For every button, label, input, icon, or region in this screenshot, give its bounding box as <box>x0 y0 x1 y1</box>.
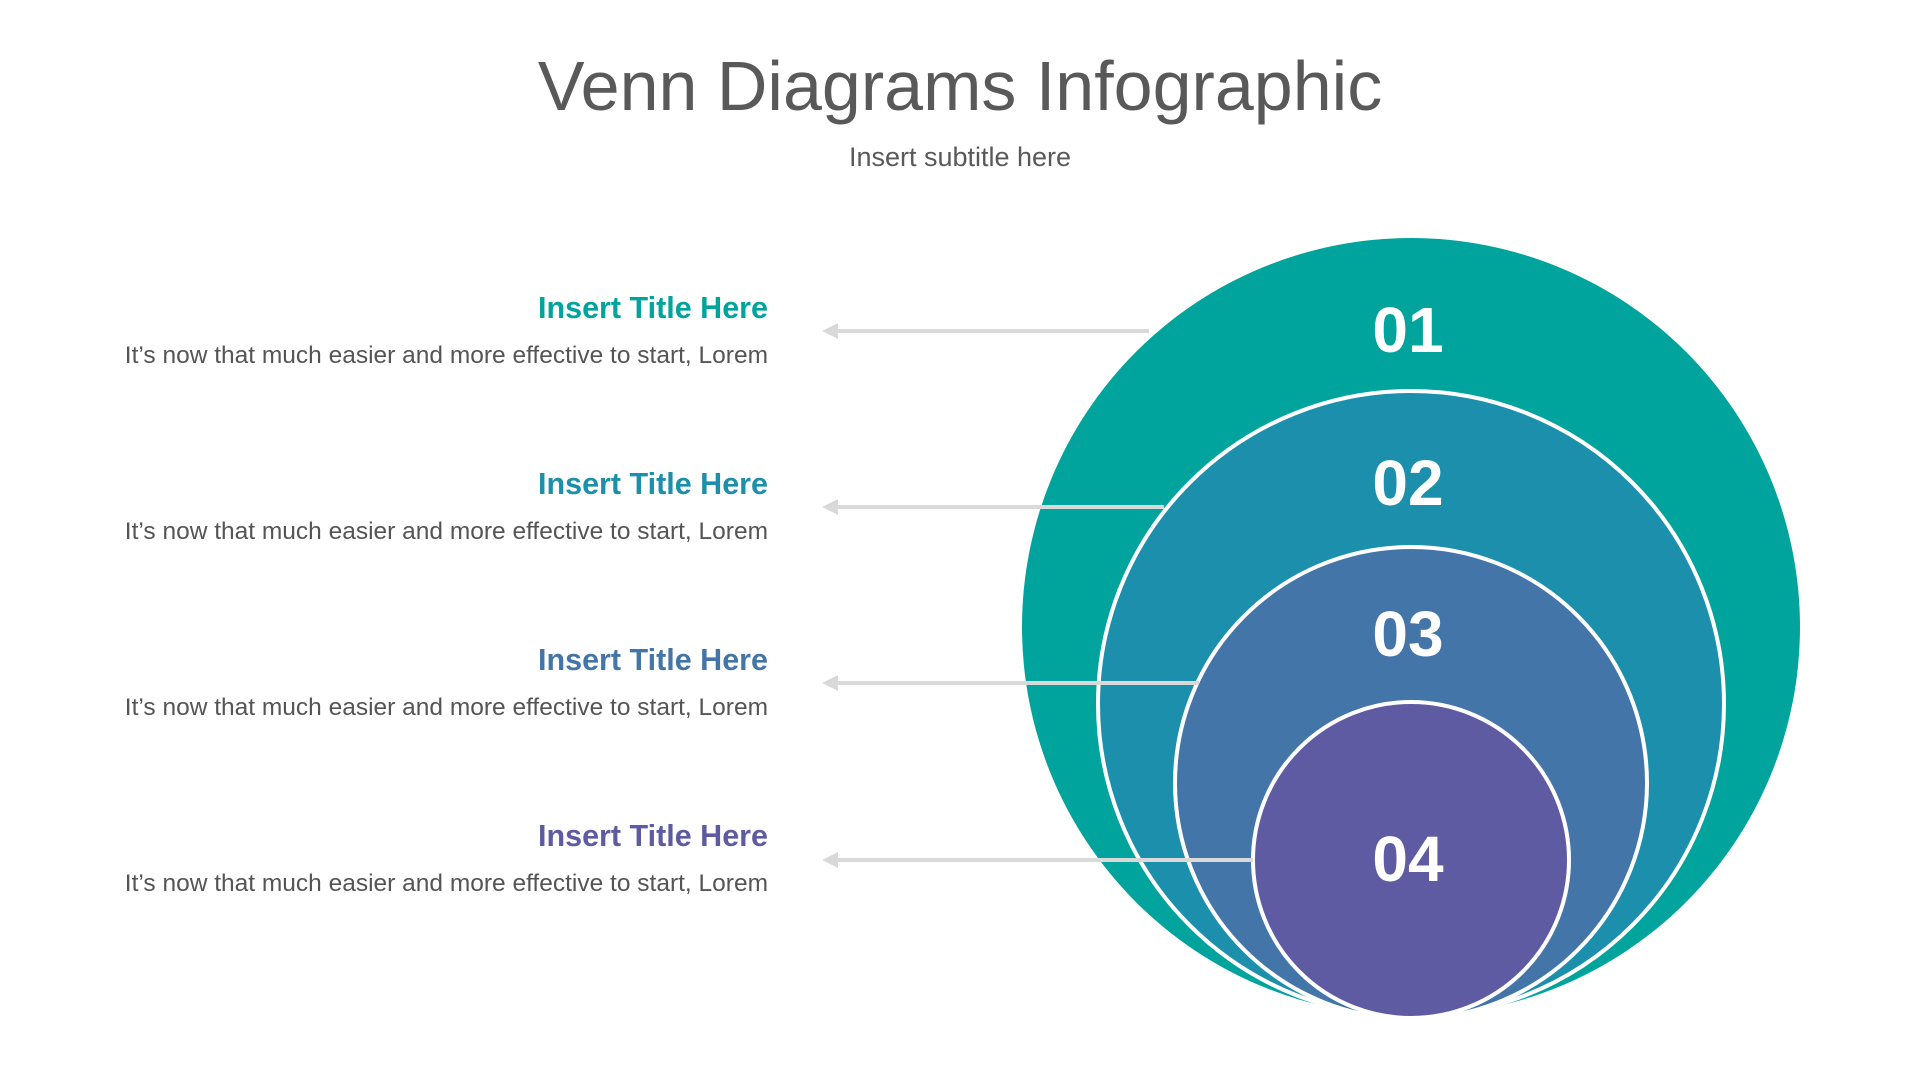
item 3 text: Insert Title Here <box>538 643 768 677</box>
item 4 text: It’s now that much easier and more effective to start, Lorem <box>125 870 768 897</box>
arrow 2 <box>822 499 1164 515</box>
circle 4 <box>1253 702 1569 1018</box>
subtitle: Insert subtitle here <box>849 142 1071 172</box>
number 03: 03 <box>1372 598 1444 670</box>
item 4 text: Insert Title Here <box>538 819 768 853</box>
circle 2 <box>1098 391 1724 1017</box>
item 3 text: It’s now that much easier and more effective to start, Lorem <box>125 694 768 721</box>
item 3 text <box>125 643 768 721</box>
number 04: 04 <box>1372 823 1444 895</box>
arrow 3 <box>822 675 1199 691</box>
circle 1 <box>1022 238 1800 1016</box>
item 2 text <box>125 467 768 545</box>
title: Venn Diagrams Infographic <box>538 47 1382 125</box>
item 1 text <box>125 291 768 369</box>
item 2 text: Insert Title Here <box>538 467 768 501</box>
item 2 text: It’s now that much easier and more effective to start, Lorem <box>125 518 768 545</box>
arrow 1 <box>822 323 1149 339</box>
item 1 text: Insert Title Here <box>538 291 768 325</box>
item 4 text <box>125 819 768 897</box>
number 01: 01 <box>1372 294 1444 366</box>
item 1 text: It’s now that much easier and more effective to start, Lorem <box>125 342 768 369</box>
arrow 4 <box>822 852 1253 868</box>
circle 3 <box>1175 547 1647 1019</box>
number 02: 02 <box>1372 447 1444 519</box>
